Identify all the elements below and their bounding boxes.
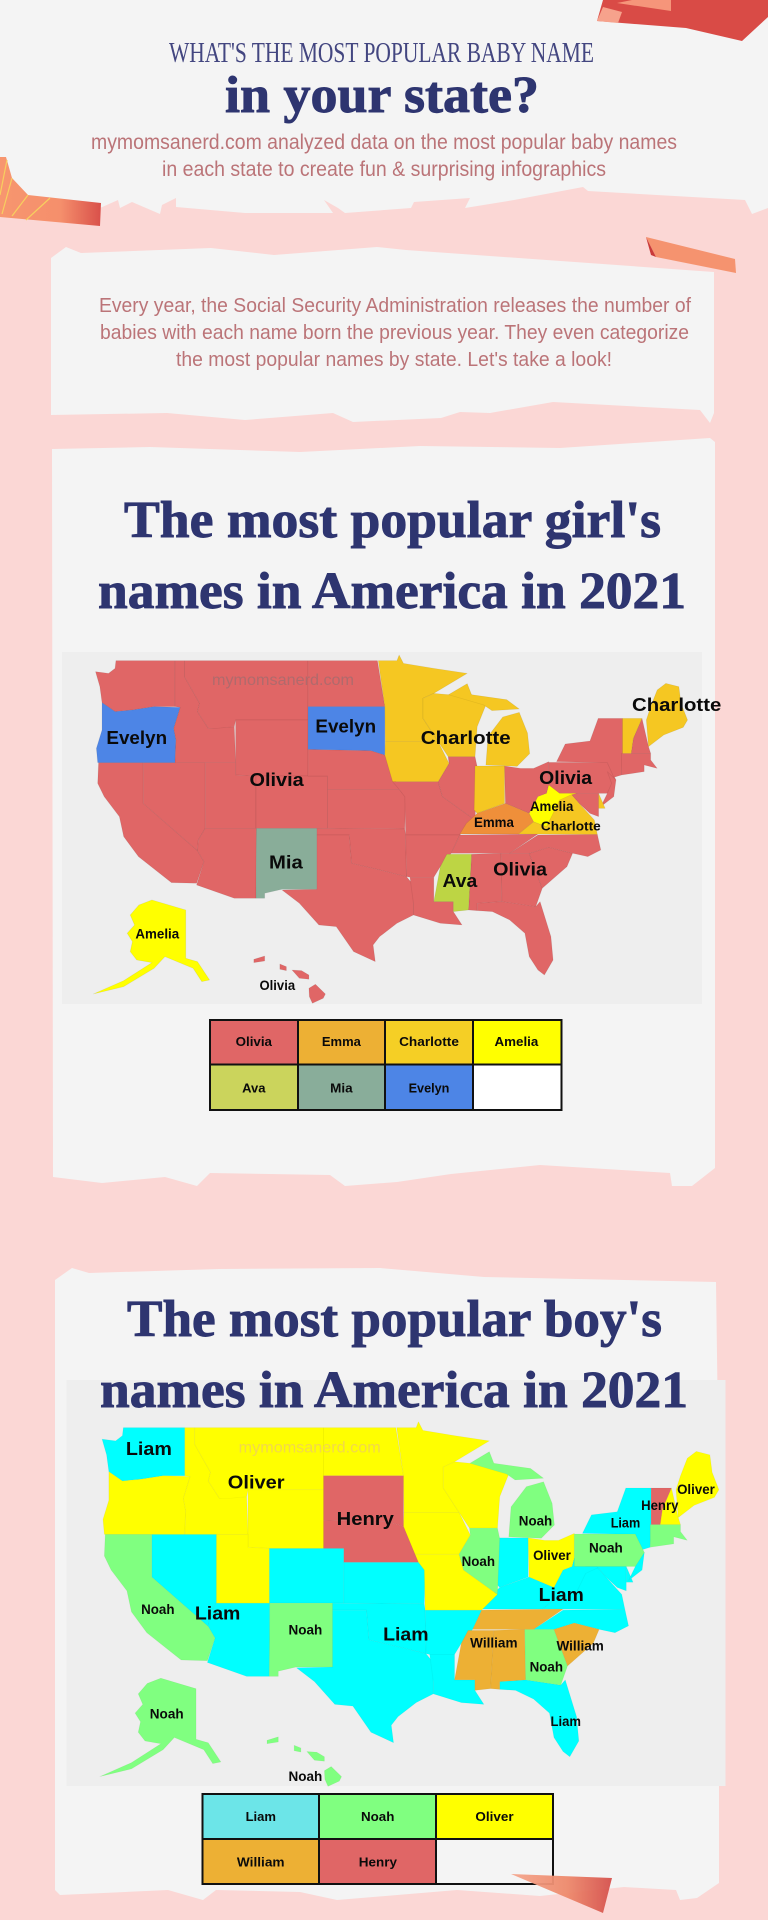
decoration: top right torn paper [597,0,768,41]
labels: boys map names: Noah [519,1514,552,1529]
panel: intro [51,247,714,423]
map: girls states [93,655,688,1003]
labels: boys map names: Noah [150,1707,184,1722]
labels: boys map names: Noah [288,1769,322,1784]
labels: boys map names: Liam [383,1624,429,1645]
panel: boys [55,1268,719,1900]
labels: boys map names: Liam [195,1602,240,1623]
labels: girls map names: Emma [474,815,514,830]
labels: boys map names: Oliver [533,1548,572,1563]
labels: boys map names: William [470,1636,518,1651]
legend: girls: Ava [242,1081,266,1096]
title: small heading: WHAT'S THE MOST POPULAR BABY NAME [169,38,594,69]
map background: girls [62,652,702,1004]
labels: girls map names: Ava [442,870,478,891]
labels: girls map names: Mia [269,852,304,873]
labels: boys map names: Oliver [228,1472,285,1493]
legend: girls [210,1020,562,1110]
labels: girls map names [106,694,721,993]
heading: girls [98,492,686,620]
labels: girls map names: Evelyn [315,715,376,736]
labels: boys map names: Liam [539,1584,584,1605]
panel: header [0,0,768,217]
labels: boys map names: Noah [288,1622,322,1637]
labels: boys map names: Noah [589,1541,623,1556]
labels: girls map names: Amelia [135,926,180,941]
labels: girls map names: Amelia [530,799,574,814]
labels: girls map names: Charlotte [632,694,721,715]
decoration: intro tape [646,237,736,273]
legend: boys: Liam [246,1809,276,1824]
labels: boys map names: Liam [611,1515,640,1530]
labels: boys map names: Liam [126,1438,172,1459]
labels: boys map names: Henry [337,1508,395,1529]
labels: boys map names: Noah [530,1660,563,1675]
heading: girls: names in America in 2021 [98,563,686,620]
panel: girls [52,438,715,1186]
labels: boys map names: Noah [141,1602,174,1617]
labels: girls map names: Charlotte [421,727,511,748]
heading: girls: The most popular girl's [124,492,661,549]
text: subtitle: in each state to create fun & surprising infographics [162,158,606,181]
decoration: left torn paper [0,157,101,226]
labels: boys map names: Henry [641,1498,679,1513]
labels: boys map names: Oliver [677,1482,716,1497]
heading: boys: names in America in 2021 [100,1362,688,1419]
legend: boys [202,1794,553,1884]
legend: girls: Amelia [494,1034,539,1049]
labels: boys map names: Liam [550,1714,581,1729]
map: boys states [100,1422,719,1786]
labels: girls map names: Olivia [539,767,593,788]
text: intro paragraph: the most popular names by state. Let's take a look! [176,349,612,371]
watermark: girls map: mymomsanerd.com [212,672,354,689]
heading: boys: The most popular boy's [127,1291,662,1348]
labels: girls map names: Olivia [250,769,304,790]
labels: girls map names: Charlotte [541,819,601,834]
legend: girls: Emma [322,1034,362,1049]
text: subtitle [91,131,677,181]
text: intro paragraph: Every year, the Social Security Administration releases the number of [99,295,691,317]
legend: boys: Noah [361,1809,394,1824]
text: intro paragraph [99,295,691,371]
heading: boys [100,1291,688,1419]
decoration: triangle over boys legend [511,1874,612,1913]
legend: girls: Charlotte [399,1034,459,1049]
legend: boys: William [237,1854,285,1869]
legend: girls: Olivia [236,1034,273,1049]
labels: girls map names: Olivia [493,858,548,879]
watermark: boys map: mymomsanerd.com [239,1440,381,1457]
legend: girls: Evelyn [409,1081,449,1096]
legend: girls: Mia [330,1081,353,1096]
text: subtitle: mymomsanerd.com analyzed data on the most popular baby names [91,131,677,154]
title: main heading: in your state? [225,67,539,124]
labels: boys map names [126,1438,716,1784]
labels: boys map names: Noah [462,1554,495,1569]
legend: boys: Henry [359,1854,398,1869]
labels: girls map names: Evelyn [106,727,167,748]
text: intro paragraph: babies with each name born the previous year. They even categorize [100,322,689,344]
labels: girls map names: Olivia [260,978,296,993]
labels: boys map names: William [556,1639,604,1654]
map background: boys [66,1380,726,1786]
legend: boys: Oliver [475,1809,514,1824]
